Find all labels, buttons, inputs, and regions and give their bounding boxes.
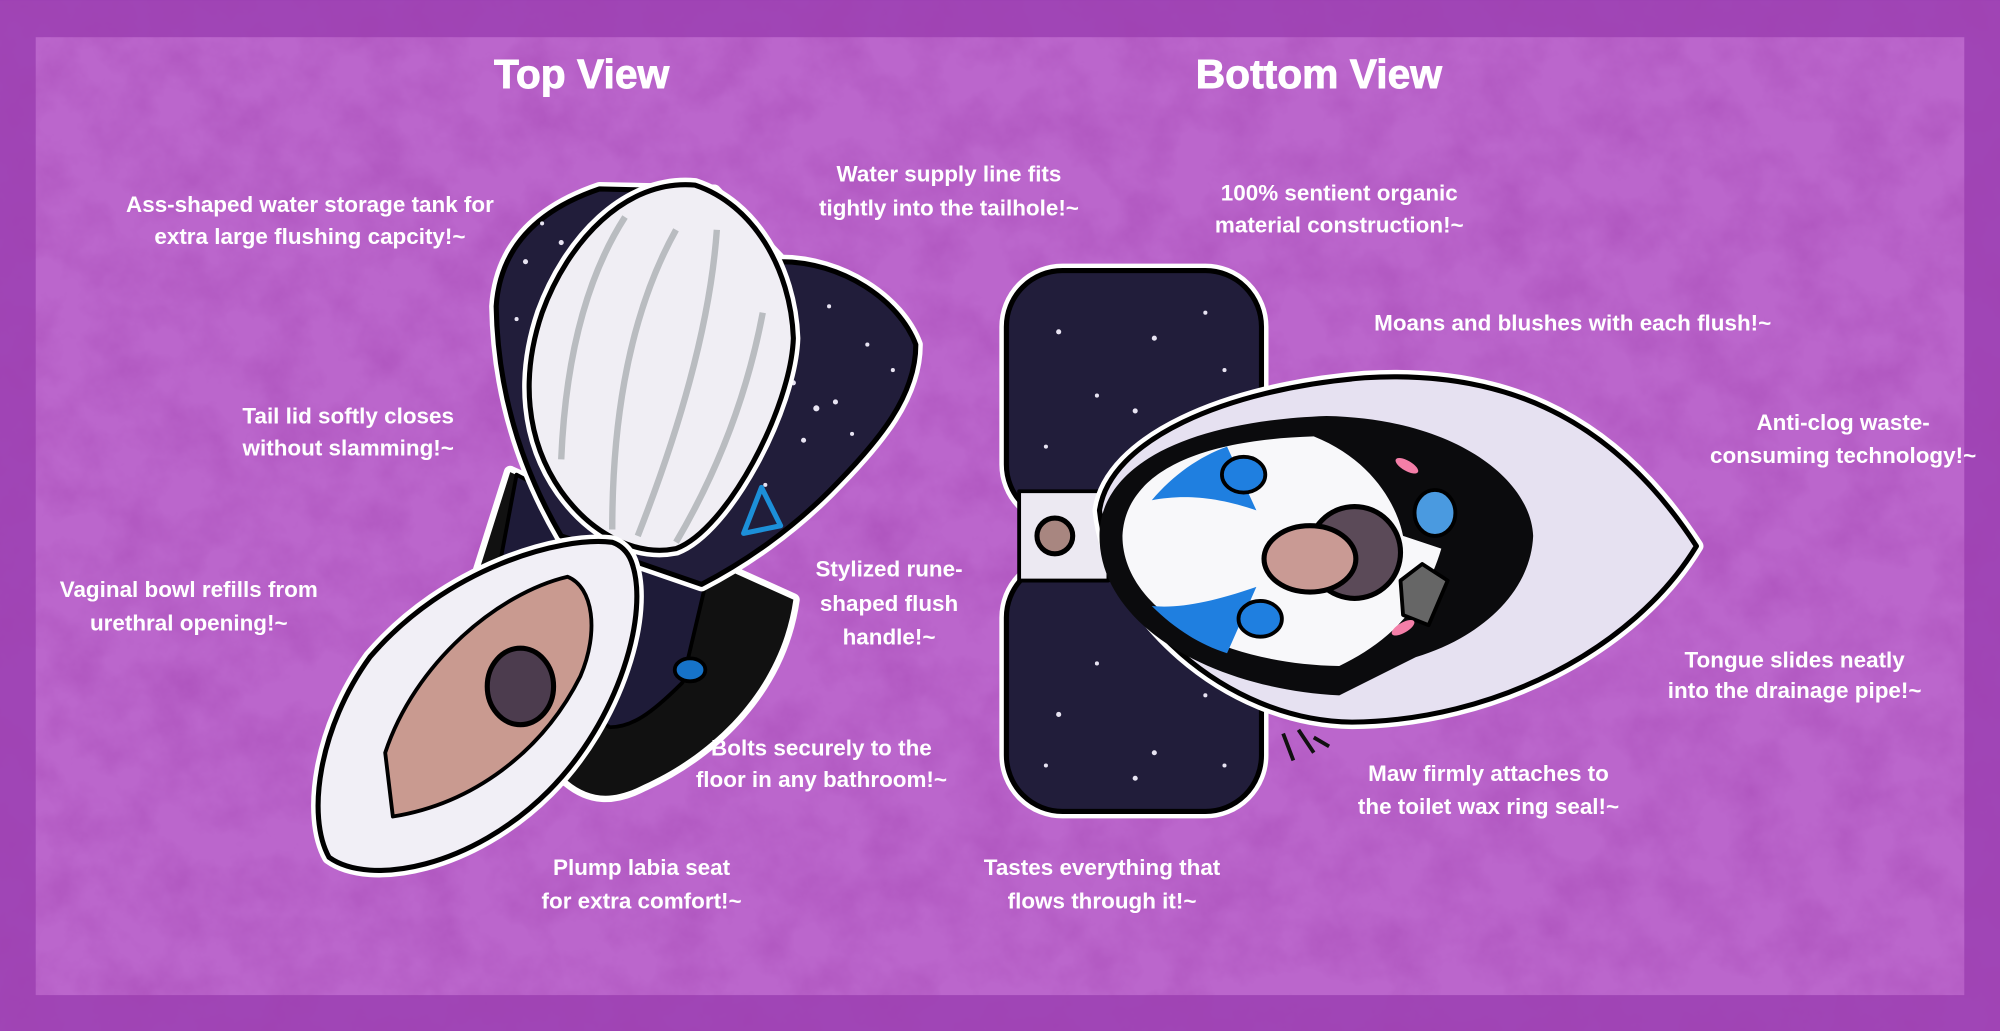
tank lobe: lower [1006,561,1261,811]
caption: flush reaction: Moans and blushes with each flush!~ [1374,311,1771,336]
caption: taste: flows through it!~ [1008,888,1196,913]
caption: seat: Plump labia seat [553,855,731,880]
flush handle [744,487,781,533]
caption: anti-clog: consuming technology!~ [1710,443,1976,468]
caption: flush handle: shaped flush [820,591,958,616]
caption: wax ring: Maw firmly attaches to [1368,761,1609,786]
caption: flush handle: Stylized rune- [815,557,963,582]
caption: construction: material construction!~ [1215,212,1464,237]
caption: floor bolts: floor in any bathroom!~ [696,767,947,792]
caption: floor bolts: Bolts securely to the [711,735,932,760]
caption: drainage: into the drainage pipe!~ [1668,678,1921,703]
signature [1283,730,1329,760]
caption: drainage: Tongue slides neatly [1685,647,1905,672]
heading: top view: Top View [494,51,670,97]
hair [1099,416,1533,695]
caption: anti-clog: Anti-clog waste- [1756,410,1930,435]
face [1122,436,1455,666]
caption: wax ring: the toilet wax ring seal!~ [1358,794,1619,819]
caption: flush handle: handle!~ [843,624,935,649]
seat [318,541,637,870]
caption: tail lid: without slamming!~ [242,436,454,461]
drain opening [1309,507,1401,598]
caption: water tank: Ass-shaped water storage tank for [126,192,494,217]
caption: bowl refill: Vaginal bowl refills from [60,577,318,602]
caption: seat: for extra comfort!~ [542,888,742,913]
caption: water supply line: tightly into the tailhole!~ [819,196,1079,221]
bowl [1099,377,1696,722]
lid [529,185,793,550]
bolt cap [675,658,705,681]
caption: taste: Tastes everything that [984,855,1221,880]
connector [1019,491,1108,581]
caption: bowl refill: urethral opening!~ [90,610,288,635]
heading: bottom view: Bottom View [1196,51,1442,97]
water tank [496,189,916,584]
base [434,472,793,796]
tank lobe: upper [1006,271,1261,521]
caption: tail lid: Tail lid softly closes [242,404,454,429]
caption: construction: 100% sentient organic [1221,180,1458,205]
illustration: bottom view [1006,271,1696,811]
illustration: top view [318,185,916,870]
caption: water supply line: Water supply line fits [837,161,1061,186]
caption: water tank: extra large flushing capcity!~ [154,224,466,249]
tongue [1264,526,1356,592]
